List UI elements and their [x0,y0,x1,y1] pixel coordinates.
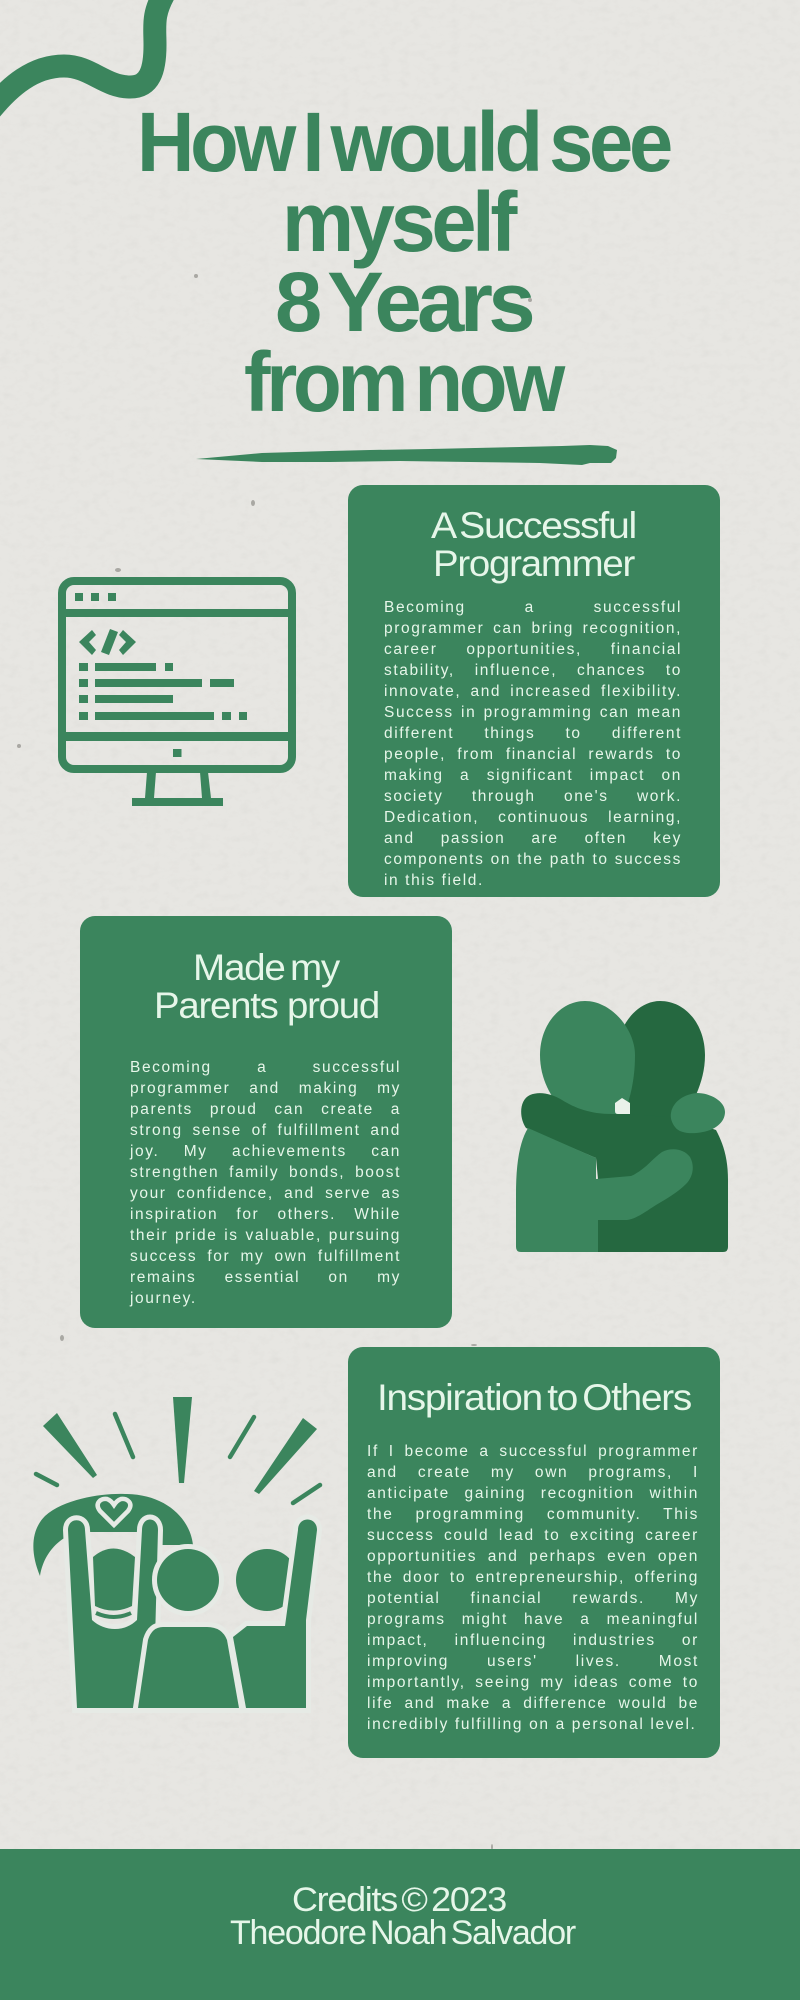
icon: cheering crowd with banner [33,1397,322,1709]
text block: inspiration body: the door to entrepreneurship, offering [367,1569,699,1586]
decorative squiggle [0,0,174,116]
title [137,95,671,429]
heading: inspiration to others: Inspiration to Others [377,1377,692,1418]
panel: made my parents proud [80,916,452,1328]
title: myself [282,175,518,269]
text block: inspiration body: anticipate gaining recognition within [367,1485,699,1502]
text block: inspiration body: the programming community. This [367,1506,699,1523]
text block: programmer body: Becoming a successful [384,599,682,616]
text block: programmer body: different things to different [384,725,682,742]
title: 8 Years [275,255,533,349]
text block: parents body: Becoming a successful [130,1059,401,1076]
text block: programmer body: components on the path to success [384,851,682,868]
text block: programmer body: innovate, and increased flexibility. [384,683,682,700]
left person [68,1520,158,1708]
text block: parents body: programmer and making my [130,1080,401,1097]
title: from now [244,335,566,429]
panel: a successful programmer [348,485,720,897]
text block: programmer body: making a significant impact on [384,767,682,784]
brush stroke underline [196,445,617,465]
text block: inspiration body: success could lead to exciting career [367,1527,699,1544]
text block: inspiration body: importantly, seeing my ideas come to [367,1674,699,1691]
heading: a successful programmer: Programmer [433,543,635,584]
heading: a successful programmer: A Successful [431,505,636,546]
heading: made my parents proud: Parents proud [154,985,379,1026]
text block: inspiration body: incredibly fulfilling on a personal level. [367,1716,696,1733]
icon: two people hugging [516,1001,728,1252]
text block: parents body: parents proud can create a [130,1101,401,1118]
text block: programmer body: people, from financial rewards to [384,746,682,763]
heading: made my parents proud: Made my [193,947,341,988]
banner [33,1494,193,1576]
icon: computer monitor with code [58,577,296,806]
heading: made my parents proud [154,947,379,1026]
text block: parents body: your confidence, and serve as [130,1185,401,1202]
text block: parents body: their pride is valuable, pursuing [130,1227,401,1244]
text block: parents body: inspiration for others. While [130,1206,401,1223]
text block: programmer body: career opportunities, financial [384,641,682,658]
text block: inspiration body: improving users' lives. Most [367,1653,699,1670]
text block: programmer body: stability, influence, chances to [384,662,682,679]
text block: programmer body: in this field. [384,872,484,889]
panel: footer credits [0,1849,800,2000]
credits text: Credits © 2023 [292,1881,506,1919]
text block: parents body: journey. [130,1290,197,1307]
text block: parents body: remains essential on my [130,1269,401,1286]
text block: inspiration body: opportunities and perhaps even open [367,1548,699,1565]
text block: programmer body: Dedication, continuous learning, [384,809,682,826]
text block: inspiration body: programs might have a meaningful [367,1611,699,1628]
rays [36,1397,320,1503]
text block: inspiration body: potential financial rewards. My [367,1590,699,1607]
credits text: Theodore Noah Salvador [230,1914,576,1952]
text block: inspiration body: impact, influencing industries or [367,1632,699,1649]
text block: inspiration body: If I become a successful programmer [367,1443,699,1460]
heart [98,1499,130,1525]
text block: inspiration body: life and make a difference would be [367,1695,699,1712]
text block: parents body: strengthen family bonds, boost [130,1164,401,1181]
text block: parents body: strong sense of fulfillment and [130,1122,401,1139]
text block: parents body: joy. My achievements can [130,1143,401,1160]
heading: a successful programmer [431,505,636,584]
text block: parents body [130,1059,401,1307]
text block: inspiration body: and create my own programs, I [367,1464,699,1481]
credits text [230,1881,576,1952]
text block: programmer body [384,599,682,889]
text block: programmer body: Success in programming can mean [384,704,682,721]
text block: programmer body: society through one's work. [384,788,682,805]
panel: inspiration to others [348,1347,720,1758]
right person [236,1549,298,1611]
text block: programmer body: and passion are often key [384,830,682,847]
text block: parents body: success for my own fulfillment [130,1248,401,1265]
title: How I would see [137,95,671,189]
text block: programmer body: programmer can bring recognition, [384,620,682,637]
text block: inspiration body [367,1443,699,1733]
center person [157,1549,219,1611]
